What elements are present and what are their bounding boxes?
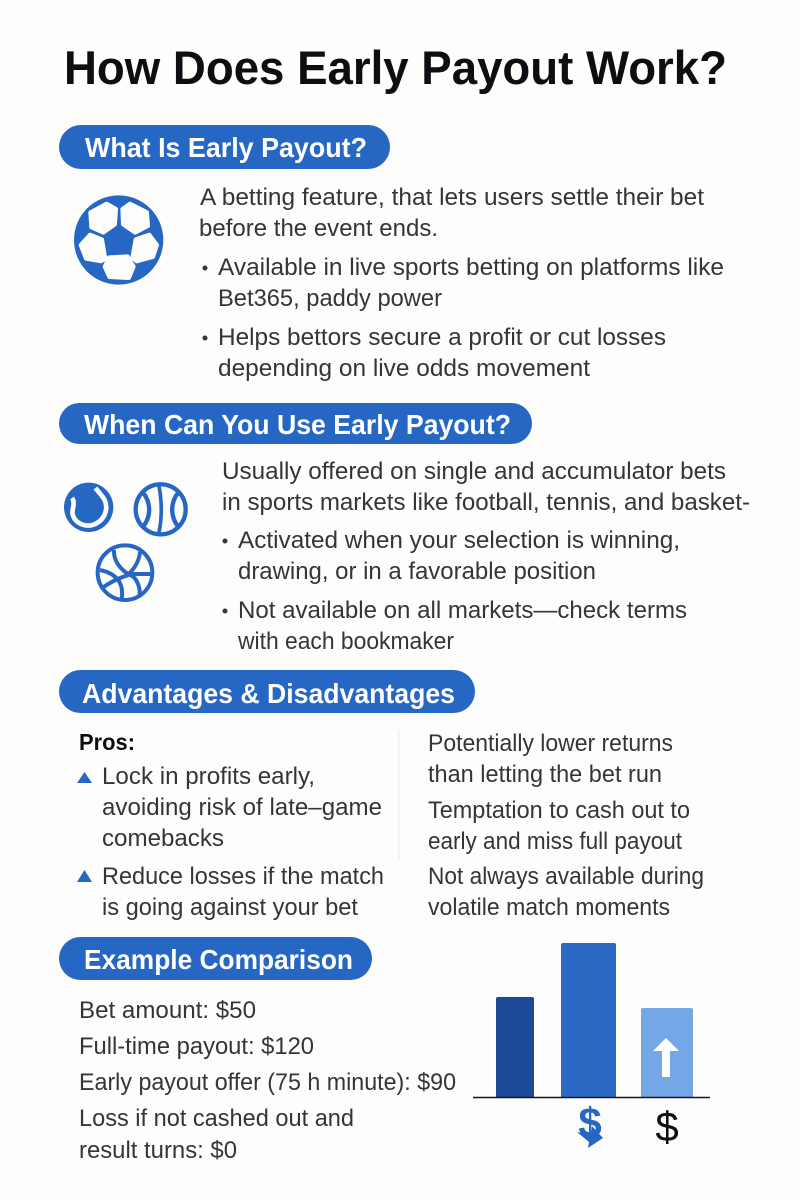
icon: tennis ball (64, 483, 113, 532)
text: pros: is going against your bet (102, 894, 358, 921)
text: what is early payout: before the event ends. (199, 215, 438, 242)
panel: when can you use early payout (59, 403, 750, 655)
bar chart (473, 943, 710, 1150)
text: what is early payout: A betting feature, that lets users settle their bet (200, 184, 704, 211)
panel: example comparison (59, 937, 710, 1164)
text: example figures: Loss if not cashed out and (79, 1105, 354, 1132)
heading: what is early payout (59, 125, 390, 169)
icon: basketball (98, 545, 152, 600)
heading: what is early payout: What Is Early Payout? (85, 132, 367, 163)
text: example figures (79, 997, 456, 1164)
text: cons (428, 730, 704, 921)
text: cons: than letting the bet run (428, 761, 662, 788)
panel: what is early payout (59, 125, 724, 382)
heading: advantages and disadvantages: Advantages & Disadvantages (82, 678, 455, 709)
text: when can you use: drawing, or in a favorable position (238, 558, 596, 585)
text: what is early payout: Available in live sports betting on platforms like (218, 254, 724, 281)
text: example figures: Early payout offer (75 h minute): $90 (79, 1069, 456, 1096)
text: cons: Temptation to cash out to (428, 797, 690, 824)
text: when can you use: Usually offered on single and accumulator bets (222, 458, 726, 485)
icon: sports balls (64, 483, 186, 600)
text: pros: comebacks (102, 825, 224, 852)
icon: basketball side view (136, 484, 186, 534)
text: example figures: Full-time payout: $120 (79, 1033, 314, 1060)
text: what is early payout: Bet365, paddy power (218, 285, 442, 312)
icon: black dollar: $ (655, 1103, 679, 1150)
heading: advantages and disadvantages (59, 670, 475, 713)
text: what is early payout: Helps bettors secure a profit or cut losses (218, 324, 666, 351)
text: when can you use (222, 458, 750, 655)
text: cons: early and miss full payout (428, 828, 682, 855)
text: when can you use: Not available on all markets—check terms (238, 597, 687, 624)
text: cons: Potentially lower returns (428, 730, 673, 757)
text: pros: avoiding risk of late–game (102, 794, 382, 821)
text: pros: Pros: (79, 729, 135, 755)
text: pros: Reduce losses if the match (102, 863, 384, 890)
text: what is early payout (199, 184, 724, 382)
heading: when can you use: When Can You Use Early Payout? (84, 409, 511, 440)
title: How Does Early Payout Work? (64, 41, 727, 94)
heading: example comparison: Example Comparison (84, 944, 353, 975)
text: when can you use: with each bookmaker (237, 628, 454, 655)
text: what is early payout: depending on live odds movement (218, 355, 590, 382)
text: when can you use: Activated when your selection is winning, (238, 527, 680, 554)
icon: up arrow (653, 1038, 679, 1077)
text: pros: Lock in profits early, (102, 763, 315, 790)
icon: soccer ball (74, 195, 163, 285)
text: when can you use: in sports markets like football, tennis, and basket- (222, 489, 750, 516)
heading: example comparison (59, 937, 372, 980)
text: cons: Not always available during (428, 863, 704, 890)
text: example figures: Bet amount: $50 (79, 997, 256, 1024)
panel: advantages and disadvantages (59, 670, 704, 921)
icon: blue dollar with arrow: $ (578, 1099, 602, 1146)
text: cons: volatile match moments (428, 894, 670, 921)
text: example figures: result turns: $0 (79, 1137, 237, 1164)
text: pros (77, 729, 384, 921)
